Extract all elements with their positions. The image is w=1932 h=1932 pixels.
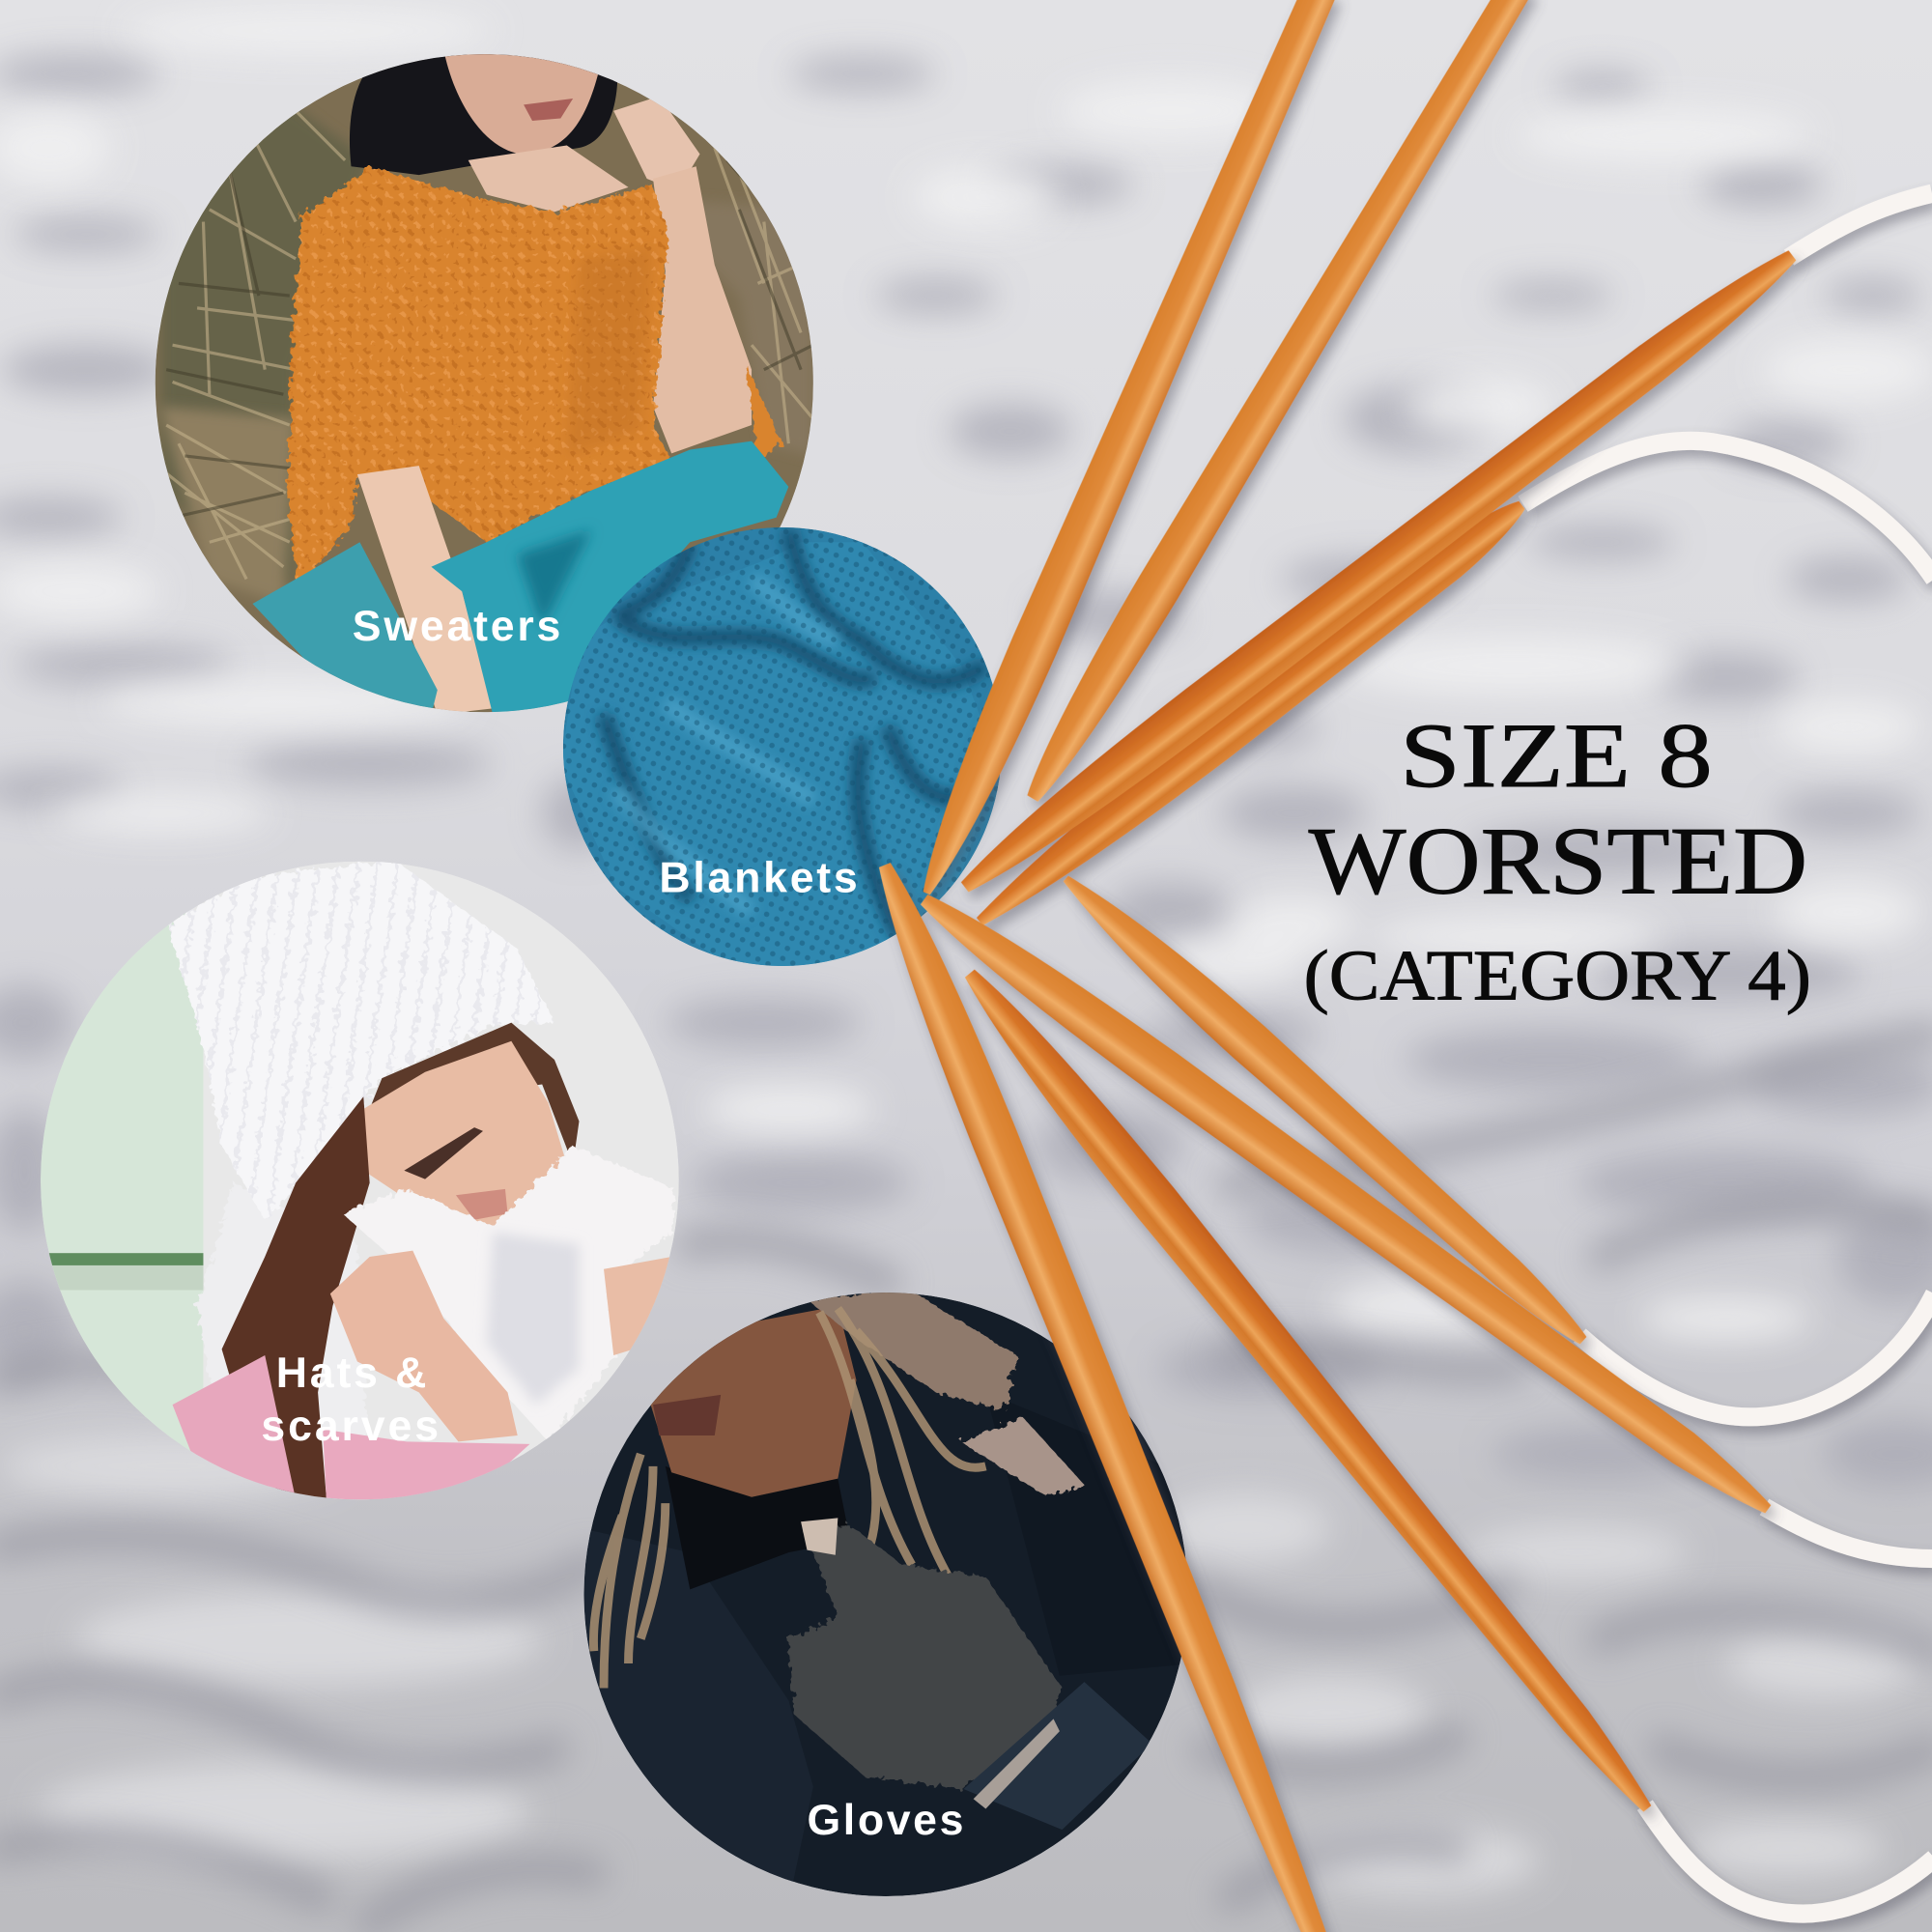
photo circle: hats and scarves <box>37 860 679 1503</box>
photo circle: blankets <box>560 527 1002 974</box>
title: size 8 worsted (category 4): (CATEGORY 4) <box>1303 936 1811 1015</box>
needle 7 <box>952 958 1665 1824</box>
needle 3 <box>951 237 1806 906</box>
needle 4 <box>966 488 1535 939</box>
photo circle: sweaters <box>156 49 813 715</box>
label: sweaters: Sweaters <box>353 603 560 650</box>
needle 2 <box>1013 0 1538 810</box>
label: hats and scarves: scarves <box>261 1403 439 1450</box>
needle 5 <box>1051 862 1598 1357</box>
bamboo needles <box>863 0 1806 1932</box>
label: hats and scarves: Hats & <box>276 1350 426 1397</box>
label: blankets: Blankets <box>659 854 858 901</box>
title: size 8 worsted (category 4): SIZE 8 <box>1400 704 1713 807</box>
label: gloves: Gloves <box>807 1797 963 1844</box>
title: size 8 worsted (category 4): WORSTED <box>1309 808 1807 915</box>
photo circle: gloves <box>579 1288 1195 1904</box>
needle 6 <box>910 880 1781 1528</box>
needle 8 <box>863 856 1341 1932</box>
label: hats and scarves <box>261 1350 439 1450</box>
needle 1 <box>905 0 1342 902</box>
needle cables <box>1523 193 1932 1914</box>
title: size 8 worsted (category 4) <box>1303 704 1811 1015</box>
